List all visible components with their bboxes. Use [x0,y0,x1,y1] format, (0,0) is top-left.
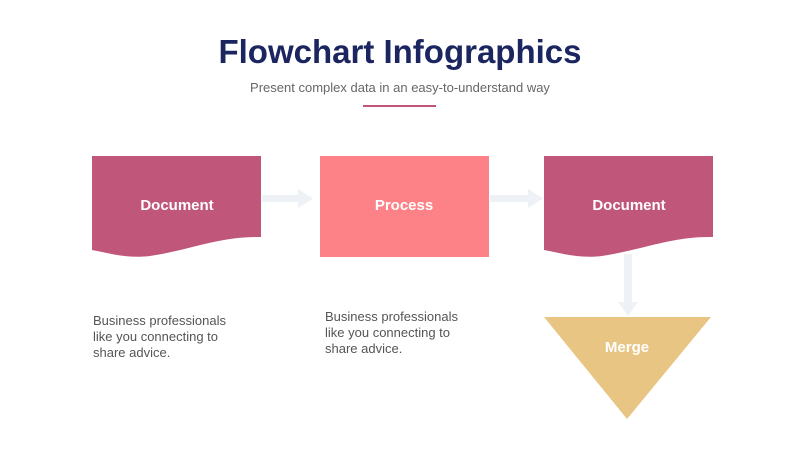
shape: merge [544,317,711,419]
subtitle: Present complex data in an easy-to-understand way [250,80,550,95]
text block 1: Business professionals [93,313,226,328]
text block 1: like you connecting to [93,329,218,344]
shape: document 1 [92,156,261,257]
shape: document 1: Document [140,197,214,214]
text block 2: share advice. [325,341,402,356]
underline [363,105,436,107]
shape: document 2: Document [592,197,666,214]
arrow: doc to process [262,189,313,208]
text block 2 [325,309,458,356]
arrow: doc down to merge [618,254,638,316]
shape: document 2 [544,156,713,257]
text block 2: Business professionals [325,309,458,324]
title: Flowchart Infographics [218,33,582,70]
shape: process: Process [375,197,433,214]
shape: process [320,156,489,257]
text block 1 [93,313,226,360]
text block 2: like you connecting to [325,325,450,340]
shape: merge: Merge [605,339,649,356]
arrow: process to doc [490,189,543,208]
text block 1: share advice. [93,345,170,360]
